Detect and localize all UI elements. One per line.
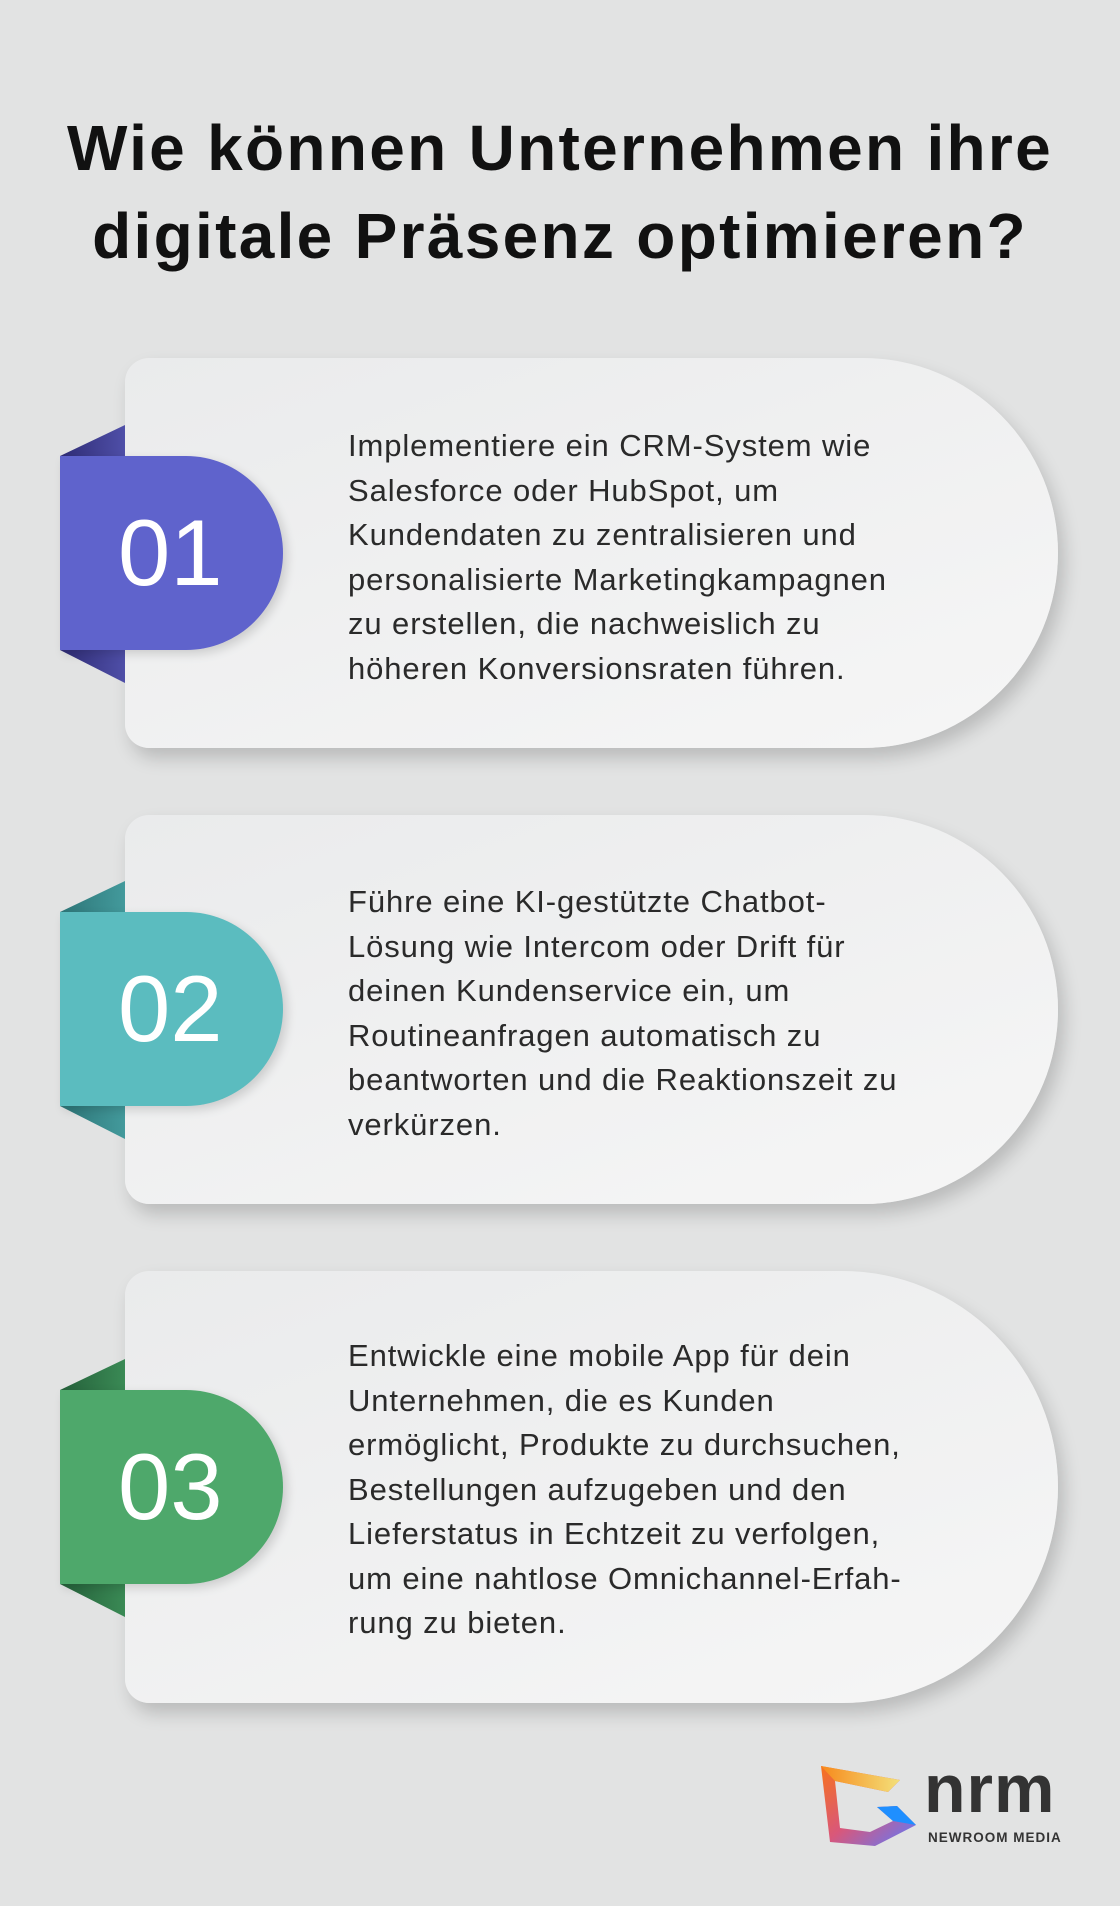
card 2	[125, 815, 1058, 1204]
text 3: rung zu bieten.	[348, 1605, 567, 1640]
fold 1	[60, 425, 125, 683]
panel: step 3	[60, 1271, 1071, 1720]
title: digitale Präsenz optimieren?	[92, 200, 1028, 272]
text 3: Bestellungen aufzugeben und den	[348, 1472, 846, 1506]
logo	[821, 1751, 1062, 1846]
text 2: Routineanfragen automatisch zu	[348, 1018, 821, 1052]
text 1: Implementiere ein CRM-System wie	[348, 428, 871, 463]
number 02: 02	[118, 956, 223, 1061]
text 1: Kundendaten zu zentralisieren und	[348, 517, 857, 552]
card 1	[125, 358, 1058, 748]
brand text: nrm	[924, 1751, 1055, 1827]
title: Wie können Unternehmen ihre	[67, 112, 1053, 184]
text 3: Lieferstatus in Echtzeit zu verfolgen,	[348, 1516, 880, 1551]
panel: step 1	[60, 358, 1071, 765]
text 2: Lösung wie Intercom oder Drift für	[348, 928, 846, 964]
text 3: Unternehmen, die es Kunden	[348, 1382, 775, 1418]
number 03: 03	[118, 1434, 223, 1539]
text 2: verkürzen.	[348, 1106, 502, 1142]
number 02	[60, 912, 283, 1106]
title	[67, 112, 1053, 272]
icon: logo mark	[821, 1766, 916, 1846]
fold 3	[60, 1359, 125, 1617]
text 2: deinen Kundenservice ein, um	[348, 973, 790, 1008]
card 3	[125, 1271, 1058, 1703]
fold 2	[60, 881, 125, 1139]
text 2: Führe eine KI-gestützte Chatbot-	[348, 884, 827, 919]
text 3: ermöglicht, Produkte zu durchsuchen,	[348, 1427, 901, 1462]
text 1: zu erstellen, die nachweislich zu	[348, 606, 821, 641]
text 3: Entwickle eine mobile App für dein	[348, 1338, 851, 1373]
logo: NEWROOM MEDIA	[928, 1830, 1062, 1845]
number 03	[60, 1390, 283, 1584]
text 2	[348, 884, 897, 1142]
text 1: personalisierte Marketingkampagnen	[348, 562, 887, 596]
text 1: höheren Konversionsraten führen.	[348, 650, 846, 686]
panel: step 2	[60, 815, 1071, 1221]
text 2: beantworten und die Reaktionszeit zu	[348, 1062, 897, 1097]
text 1: Salesforce oder HubSpot, um	[348, 472, 779, 508]
text 3	[348, 1338, 902, 1640]
text 3: um eine nahtlose Omnichannel-Erfah-	[348, 1560, 902, 1596]
text 1	[348, 428, 887, 686]
number 01: 01	[118, 500, 223, 605]
number 01	[60, 456, 283, 650]
